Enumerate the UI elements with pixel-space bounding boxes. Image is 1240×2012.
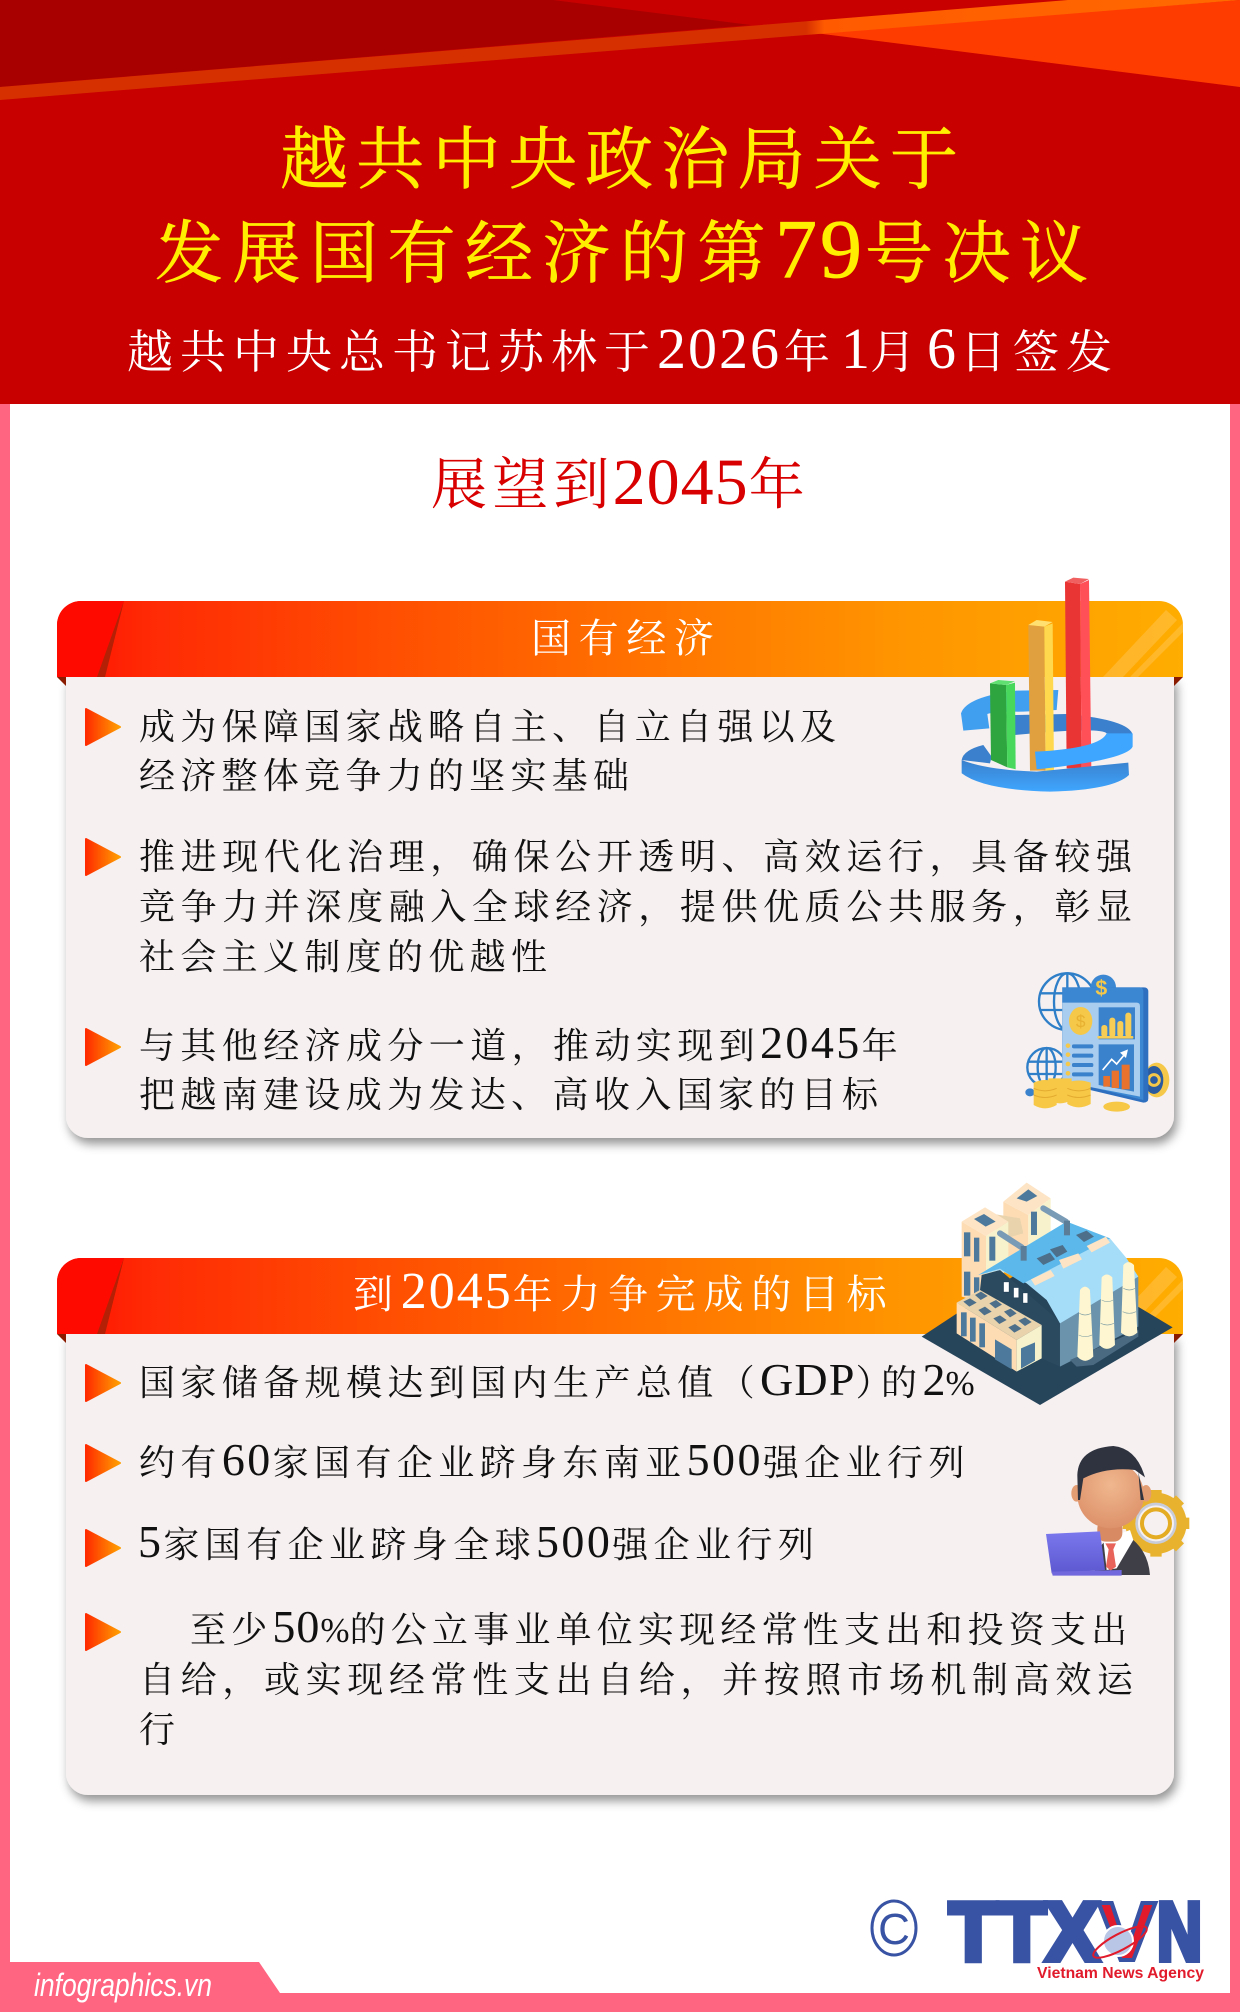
icon: factory (922, 1183, 1173, 1405)
section heading: 展望到2045年 (431, 446, 810, 519)
bullet list: 行 (139, 1710, 175, 1750)
panel: state economy (57, 601, 1183, 1138)
icon: businessman with gear (1046, 1446, 1189, 1576)
bullet list: 至少50%的公立事业单位实现经常性支出和投资支出 (190, 1601, 1132, 1652)
bullet list: 与其他经济成分一道，推动实现到2045年 (139, 1017, 903, 1068)
logo: TTXVN: Vietnam News Agency (1037, 1965, 1204, 1982)
title (155, 122, 1098, 296)
panel header bar (57, 601, 1183, 686)
bullet list: 国家储备规模达到国内生产总值（GDP）的2% (139, 1354, 975, 1405)
bullet list (86, 707, 1133, 1115)
panel header bar: 到2045年力争完成的目标 (353, 1263, 894, 1320)
icon: finance report: $ (1076, 1011, 1086, 1031)
bullet list: 社会主义制度的优越性 (139, 937, 547, 977)
footer tab: website (0, 1962, 1240, 2012)
icon: 3D bar chart (961, 578, 1133, 792)
page frame (0, 404, 1240, 2012)
logo: TTXVN: N (1157, 1885, 1202, 1978)
panel header bar: 国有经济 (531, 616, 714, 661)
subtitle: 越共中央总书记苏林于2026年1月6日签发 (127, 316, 1119, 381)
icon: finance report (1025, 973, 1169, 1112)
bullet list: 推进现代化治理，确保公开透明、高效运行，具备较强 (139, 837, 1133, 877)
bullet list: 把越南建设成为发达、高收入国家的目标 (139, 1075, 879, 1115)
logo: TTXVN (949, 1885, 1204, 1982)
bullet list: 约有60家国有企业跻身东南亚500强企业行列 (139, 1434, 970, 1485)
copyright mark: C (878, 1905, 910, 1954)
bullet list: 自给，或实现经常性支出自给，并按照市场机制高效运 (139, 1660, 1134, 1700)
header banner (0, 0, 1240, 404)
title: 发展国有经济的第79号决议 (155, 203, 1098, 296)
bullet list: 经济整体竞争力的坚实基础 (139, 756, 629, 796)
panel: 2045 targets (57, 1258, 1183, 1795)
logo: TTXVN: V (1098, 1885, 1156, 1978)
bullet list (86, 1354, 1134, 1750)
panel body (66, 677, 1174, 1138)
panel body (66, 1334, 1174, 1795)
icon: finance report: $ (1095, 976, 1107, 1000)
bullet list: 竞争力并深度融入全球经济，提供优质公共服务，彰显 (139, 887, 1132, 927)
logo: TTXVN: TTX (949, 1885, 1099, 1978)
title: 越共中央政治局关于 (280, 122, 958, 198)
footer tab: website: infographics.vn (34, 1967, 212, 2003)
copyright mark (872, 1901, 916, 1955)
panel header bar (57, 1258, 1183, 1343)
bullet list: 成为保障国家战略自主、自立自强以及 (139, 707, 836, 747)
bullet list: 5家国有企业跻身全球500强企业行列 (138, 1516, 819, 1567)
